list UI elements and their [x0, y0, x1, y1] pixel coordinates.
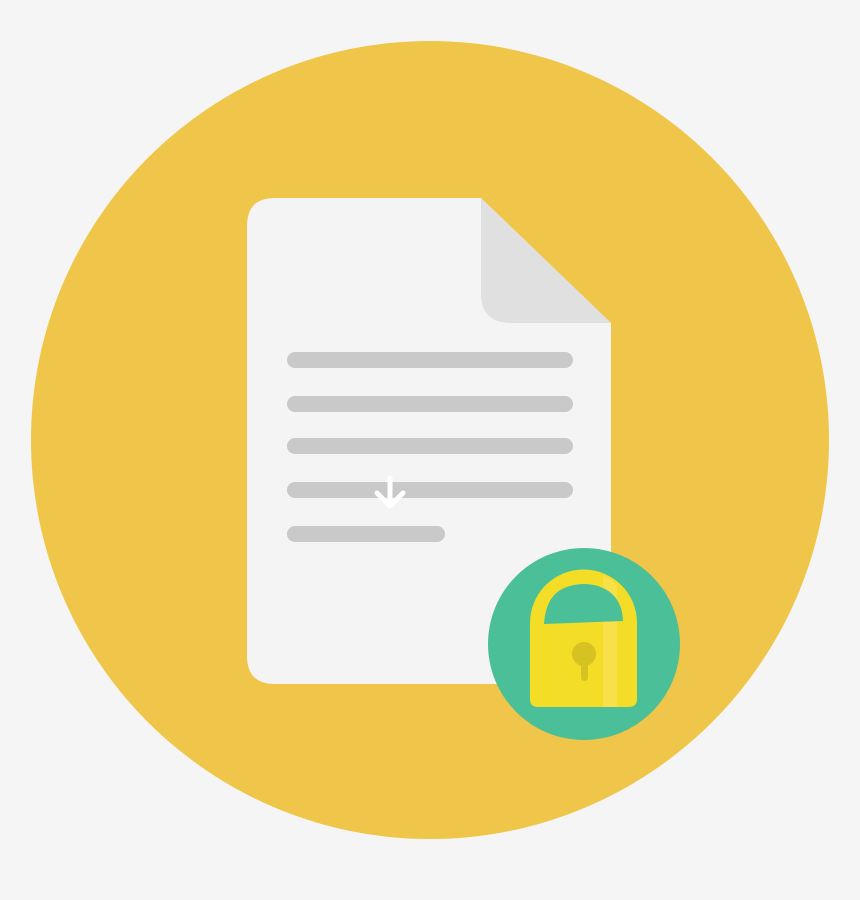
text lines [295, 360, 565, 534]
padlock body [530, 570, 637, 707]
document [247, 198, 611, 684]
icon: down arrow [377, 478, 403, 506]
lock badge [488, 548, 680, 740]
keyhole [572, 642, 596, 666]
folded corner [481, 198, 611, 323]
highlight stripe [603, 575, 617, 707]
shackle opening [544, 584, 623, 624]
